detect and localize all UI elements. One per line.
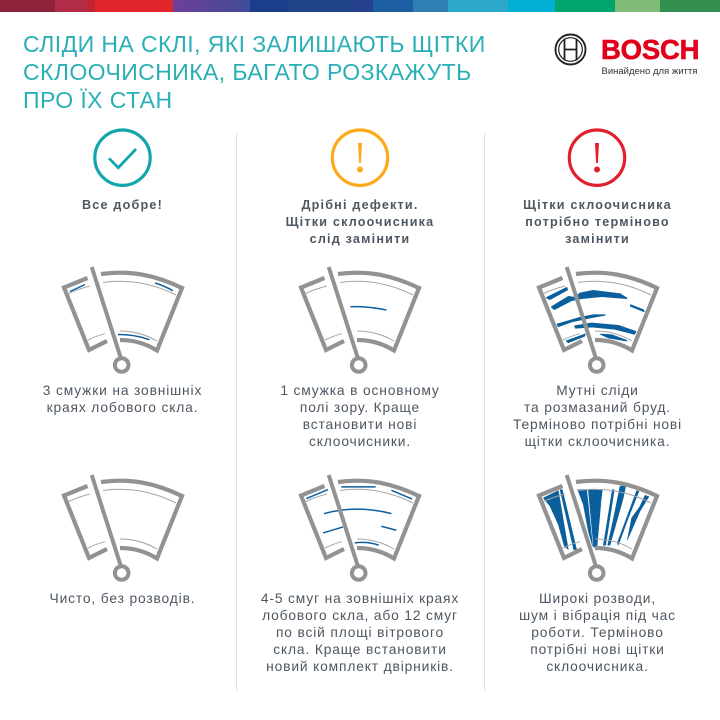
title: СКЛООЧИСНИКА, БАГАТО РОЗКАЖУТЬ — [23, 58, 472, 84]
wiper: 4-5 stripes — [298, 474, 422, 582]
wiper: wide streaks — [536, 474, 660, 582]
heading: minor defects — [286, 198, 434, 246]
top colour bar — [0, 0, 720, 12]
column divider — [484, 133, 485, 691]
heading: minor defects: слід замінити — [310, 232, 410, 246]
heading: urgent: замінити — [565, 232, 630, 246]
wiper: 1 stripe in main field — [298, 266, 422, 374]
column divider — [236, 133, 237, 691]
heading: urgent: Щітки склоочисника — [523, 198, 672, 212]
title — [23, 30, 486, 112]
text: wiper 3: та розмазаний бруд. — [524, 400, 671, 415]
icon: Bosch armature — [554, 34, 586, 66]
text: wiper 6: склоочисника. — [546, 659, 649, 674]
text: wiper 3 — [513, 383, 682, 449]
text: wiper 4: Чисто, без розводів. — [50, 591, 195, 606]
text: wiper 1: краях лобового скла. — [47, 400, 198, 415]
wordmark: BOSCH — [601, 34, 699, 65]
wiper: cloudy smears — [536, 266, 660, 374]
tagline: Винайдено для життя — [602, 66, 697, 77]
heading: urgent: потрібно терміново — [525, 215, 670, 229]
text: wiper 3: Мутні сліди — [556, 383, 639, 398]
text: wiper 2 — [280, 383, 440, 449]
heading: all good: Все добре! — [82, 198, 163, 212]
Bosch logo — [554, 34, 699, 77]
wiper: 3 stripes at edges — [61, 266, 185, 374]
heading: minor defects: Дрібні дефекти. — [301, 198, 419, 212]
text: wiper 6: шум і вібрація під час — [519, 608, 676, 623]
title: ПРО ЇХ СТАН — [23, 86, 172, 112]
text: wiper 2: склоочисники. — [309, 434, 411, 449]
text: wiper 5: по всій площі вітрового — [276, 625, 444, 640]
icon: red warning circle — [568, 128, 626, 187]
title: СЛІДИ НА СКЛІ, ЯКІ ЗАЛИШАЮТЬ ЩІТКИ — [23, 30, 486, 56]
text: wiper 2: 1 смужка в основному — [280, 383, 440, 398]
text: wiper 5: лобового скла, або 12 смуг — [262, 608, 458, 623]
icon: amber warning circle — [330, 128, 390, 187]
text: wiper 3: щітки склоочисника. — [525, 434, 670, 449]
text: wiper 2: полі зору. Краще — [300, 400, 420, 415]
text: wiper 1 — [43, 383, 202, 415]
text: wiper 5: новий комплект двірників. — [266, 659, 454, 674]
heading: minor defects: Щітки склоочисника — [286, 215, 434, 229]
text: wiper 5: скла. Краще встановити — [273, 642, 447, 657]
wiper: clean — [61, 474, 185, 582]
icon: check in teal circle — [93, 128, 152, 187]
text: wiper 5: 4-5 смуг на зовнішніх краях — [261, 591, 459, 606]
text: wiper 5 — [261, 591, 459, 674]
text: wiper 6: потрібні нові щітки — [530, 642, 665, 657]
text: wiper 6: роботи. Терміново — [531, 625, 664, 640]
text: wiper 1: 3 смужки на зовнішніх — [43, 383, 202, 398]
text: wiper 6 — [519, 591, 676, 674]
text: wiper 3: Терміново потрібні нові — [513, 417, 682, 432]
text: wiper 2: встановити нові — [303, 417, 417, 432]
text: wiper 6: Широкі розводи, — [539, 591, 656, 606]
heading: urgent — [523, 198, 672, 246]
